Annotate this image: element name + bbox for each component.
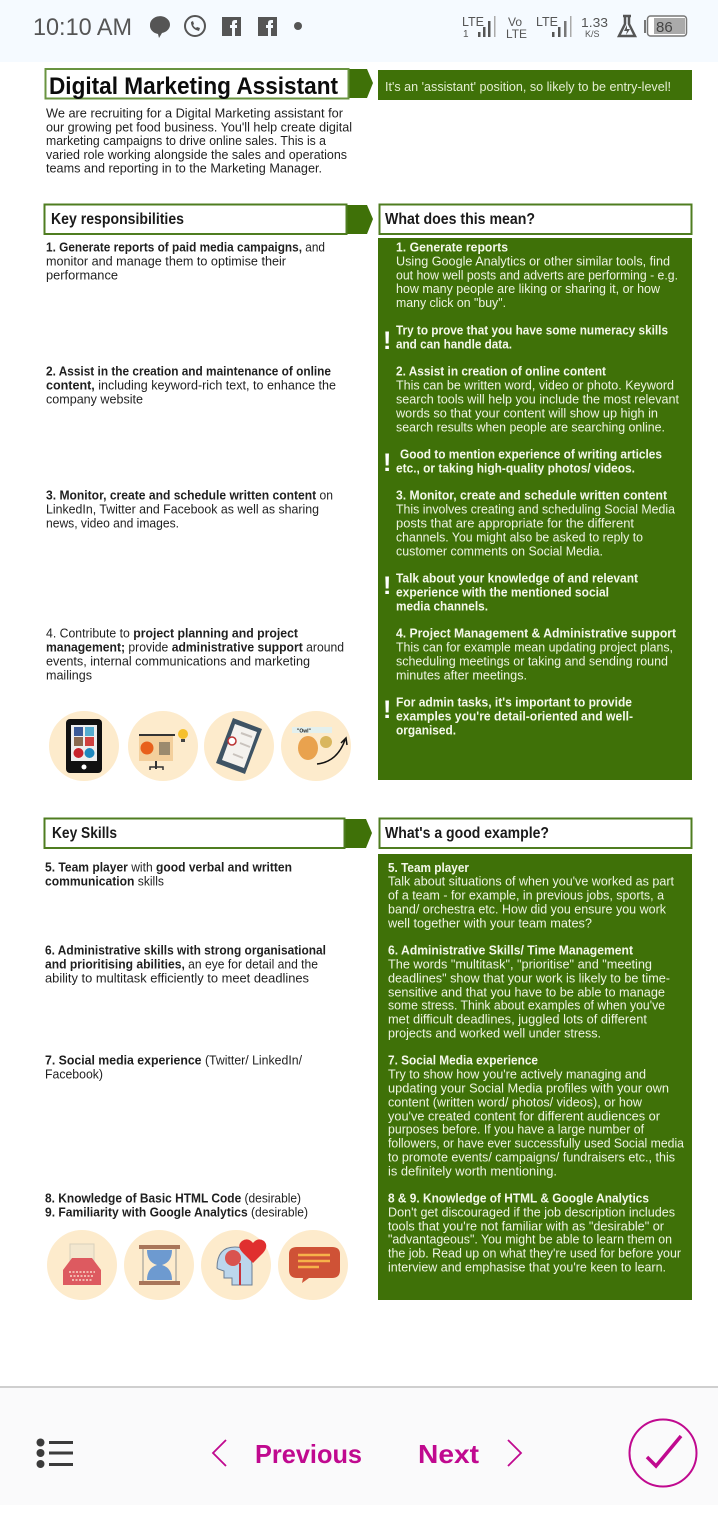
panel: what's a good example: met difficult deadlines, juggled lots of different — [388, 1012, 648, 1026]
panel: what does this mean: experience with the mentioned social — [396, 586, 609, 600]
responsibilities list: company website — [46, 392, 143, 406]
intro text: teams and reporting in to the Marketing Manager. — [46, 162, 322, 176]
panel: what's a good example: well together with your team mates? — [387, 916, 592, 930]
previous button: Previous — [255, 1439, 362, 1469]
panel: what's a good example: you've created content for different audiences or — [388, 1110, 660, 1124]
panel: what does this mean: ! — [383, 449, 391, 477]
responsibilities list: 2. Assist in the creation and maintenance of online — [46, 364, 331, 378]
panel: what's a good example — [378, 854, 692, 1300]
responsibilities list — [46, 240, 344, 682]
icon: tablet with social apps — [49, 711, 119, 781]
panel: what does this mean: Good to mention experience of writing articles — [400, 448, 662, 462]
responsibilities list: 1. Generate reports of paid media campaigns, and — [46, 240, 325, 254]
panel: what does this mean: channels. You might also be asked to reply to — [396, 530, 643, 544]
responsibilities list: monitor and manage them to optimise their — [46, 254, 286, 268]
skills list: 6. Administrative skills with strong organisational — [45, 944, 326, 958]
skills list: and prioritising abilities, an eye for detail and the — [45, 958, 318, 972]
panel: what's a good example: interview and emphasise that you're keen to learn. — [388, 1260, 666, 1274]
panel: what's a good example: followers, or have ever successfully used Social media — [388, 1136, 684, 1150]
panel: what's a good example: the job. Read up on what they're used for before your — [388, 1246, 681, 1260]
skills list: 9. Familiarity with Google Analytics (desirable) — [45, 1206, 308, 1220]
panel: what does this mean: This can be written word, video or photo. Keyword — [396, 378, 674, 392]
heading: key skills: Key Skills — [52, 825, 117, 842]
heading: what does this mean — [380, 204, 692, 234]
panel: what does this mean: ! — [383, 572, 391, 600]
icon: speech bubble — [278, 1230, 348, 1300]
panel: what's a good example: purposes before. If you have a large number of — [388, 1122, 645, 1136]
responsibilities list: management; provide administrative support around — [46, 640, 344, 654]
icon: owl search ranking — [281, 711, 351, 781]
icon: owl search ranking: "Owl" — [297, 728, 312, 734]
next button — [418, 1439, 521, 1469]
status bar: LTE — [536, 14, 558, 29]
panel: what's a good example: Try to show how you're actively managing and — [388, 1068, 646, 1082]
panel: what does this mean: organised. — [396, 724, 456, 738]
panel: what's a good example: 5. Team player — [388, 861, 469, 875]
icon: head with heart — [201, 1230, 271, 1300]
status bar — [0, 0, 718, 62]
panel: what's a good example: updating your Social Media profiles with your own — [388, 1082, 669, 1096]
intro text — [46, 106, 352, 176]
intro text: marketing campaigns to drive online sales. This is a — [46, 134, 326, 148]
callout: entry level — [378, 70, 692, 100]
heading: key responsibilities — [44, 204, 373, 234]
panel: what's a good example: projects and worked well under stress. — [388, 1026, 601, 1040]
panel: what does this mean: ! — [383, 327, 391, 355]
status bar: 10:10 AM — [33, 14, 132, 41]
panel: what does this mean: For admin tasks, it's important to provide — [396, 696, 632, 710]
status bar: LTE — [506, 27, 527, 41]
intro text: our growing pet food business. You'll help create digital — [46, 120, 352, 134]
panel: what's a good example: Don't get discouraged if the job description includes — [388, 1206, 675, 1220]
panel: what does this mean: 1. Generate reports — [396, 240, 508, 254]
heading: what does this mean: What does this mean? — [385, 211, 535, 228]
status bar: 86 — [656, 19, 673, 36]
intro text: We are recruiting for a Digital Marketing assistant for — [46, 106, 343, 120]
panel: what does this mean: This can for example mean updating project plans, — [396, 640, 673, 654]
panel: what does this mean: minutes after meetings. — [396, 668, 527, 682]
heading: key responsibilities: Key responsibilities — [51, 211, 184, 228]
status bar: K/S — [585, 29, 600, 39]
panel: what does this mean: This involves creating and scheduling Social Media — [396, 502, 675, 516]
intro text: varied role working alongside the sales and operations — [46, 148, 347, 162]
panel: what does this mean: media channels. — [396, 600, 488, 614]
skills list: 5. Team player with good verbal and written — [45, 860, 292, 874]
panel: what does this mean: 3. Monitor, create and schedule written content — [396, 488, 668, 502]
bottom navigation bar — [0, 1386, 718, 1505]
status bar: Vo — [508, 15, 522, 29]
panel: what's a good example: Talk about situations of when you've worked as part — [388, 874, 675, 888]
panel: what's a good example: content (written word/ photos/ videos), or how — [388, 1096, 643, 1110]
panel: what does this mean: etc., or taking high-quality photos/ videos. — [396, 462, 635, 476]
title banner: Digital Marketing Assistant — [49, 73, 338, 100]
panel: what does this mean: 4. Project Management & Administrative support — [396, 626, 677, 640]
panel: what's a good example: to promote events/ campaigns/ fundraisers etc., this — [388, 1150, 675, 1164]
panel: what's a good example: sensitive and that you have to be able to manage — [388, 986, 665, 1000]
status bar: LTE — [462, 14, 484, 29]
heading: what's a good example — [380, 818, 692, 848]
skills list: communication skills — [45, 874, 164, 888]
panel: what does this mean: many click on "buy". — [396, 296, 506, 310]
skills list: Facebook) — [45, 1068, 103, 1082]
icon: typewriter — [47, 1230, 117, 1300]
responsibilities list: performance — [46, 268, 118, 282]
responsibilities list: mailings — [46, 668, 92, 682]
next button: Next — [418, 1439, 479, 1469]
panel: what's a good example: is definitely worth mentioning. — [388, 1164, 557, 1178]
panel: what's a good example: 8 & 9. Knowledge of HTML & Google Analytics — [388, 1192, 649, 1206]
heading: what's a good example: What's a good example? — [385, 825, 549, 842]
responsibilities list: 3. Monitor, create and schedule written content on — [46, 488, 333, 502]
status bar: 1.33 — [581, 15, 608, 30]
icon: list menu — [36, 1438, 73, 1468]
panel: what's a good example: The words "multitask", "prioritise" and "meeting — [388, 958, 652, 972]
skills list: 7. Social media experience (Twitter/ LinkedIn/ — [45, 1054, 303, 1068]
skills list: 8. Knowledge of Basic HTML Code (desirable) — [45, 1192, 301, 1206]
responsibilities list: news, video and images. — [46, 516, 179, 530]
panel: what's a good example: deadlines" show that your work is likely to be time- — [388, 972, 670, 986]
panel: what does this mean: search results when people are searching online. — [396, 420, 665, 434]
skills list — [45, 860, 326, 1220]
panel: what does this mean: Using Google Analytics or other similar tools, find — [396, 254, 670, 268]
responsibilities list: LinkedIn, Twitter and Facebook as well as sharing — [46, 502, 319, 516]
panel: what's a good example: some stress. Think about examples of when you've — [388, 998, 665, 1012]
panel: what does this mean: scheduling meetings or taking and sending round — [396, 654, 668, 668]
panel: what does this mean: posts that are appropriate for the different — [396, 516, 635, 530]
panel: what does this mean: words so that your content will show up high in — [395, 406, 658, 420]
check button — [630, 1420, 696, 1486]
skills list: ability to multitask efficiently to meet deadlines — [45, 972, 309, 986]
icon: presentation board — [128, 711, 198, 781]
panel: what's a good example: 7. Social Media experience — [388, 1054, 538, 1068]
icon: hourglass — [124, 1230, 194, 1300]
responsibilities list: 4. Contribute to project planning and project — [46, 626, 299, 640]
panel: what does this mean: Talk about your knowledge of and relevant — [396, 572, 639, 586]
panel: what does this mean: search tools will help you include the most relevant — [396, 392, 680, 406]
panel: what does this mean: out how well posts and adverts are performing - e.g. — [396, 268, 678, 282]
panel: what does this mean: how many people are liking or sharing it, or how — [396, 282, 661, 296]
panel: what does this mean: customer comments on Social Media. — [396, 544, 603, 558]
panel: what does this mean: and can handle data. — [396, 338, 512, 352]
panel: what's a good example: band/ orchestra etc. How did you ensure you work — [388, 902, 667, 916]
panel: what does this mean: Try to prove that you have some numeracy skills — [396, 324, 668, 338]
panel: what does this mean: 2. Assist in creation of online content — [396, 364, 607, 378]
panel: what does this mean: examples you're detail-oriented and well- — [396, 710, 633, 724]
panel: what's a good example: tools that you're not familiar with as "desirable" or — [388, 1220, 664, 1234]
responsibilities list: events, internal communications and marketing — [46, 654, 310, 668]
callout: entry level: It's an 'assistant' position, so likely to be entry-level! — [385, 79, 671, 94]
panel: what's a good example: of a team - for example, in previous jobs, sports, a — [388, 888, 664, 902]
icon: clipboard with magnifier — [204, 711, 274, 781]
panel: what's a good example: 6. Administrative Skills/ Time Management — [388, 944, 634, 958]
responsibilities list: content, including keyword-rich text, to enhance the — [46, 378, 336, 392]
panel: what's a good example: "advantageous". You might be able to learn them on — [388, 1232, 672, 1246]
panel: what does this mean — [378, 238, 692, 780]
status bar: 1 — [463, 29, 469, 40]
panel: what does this mean: ! — [383, 696, 391, 724]
heading: key skills — [44, 818, 372, 848]
